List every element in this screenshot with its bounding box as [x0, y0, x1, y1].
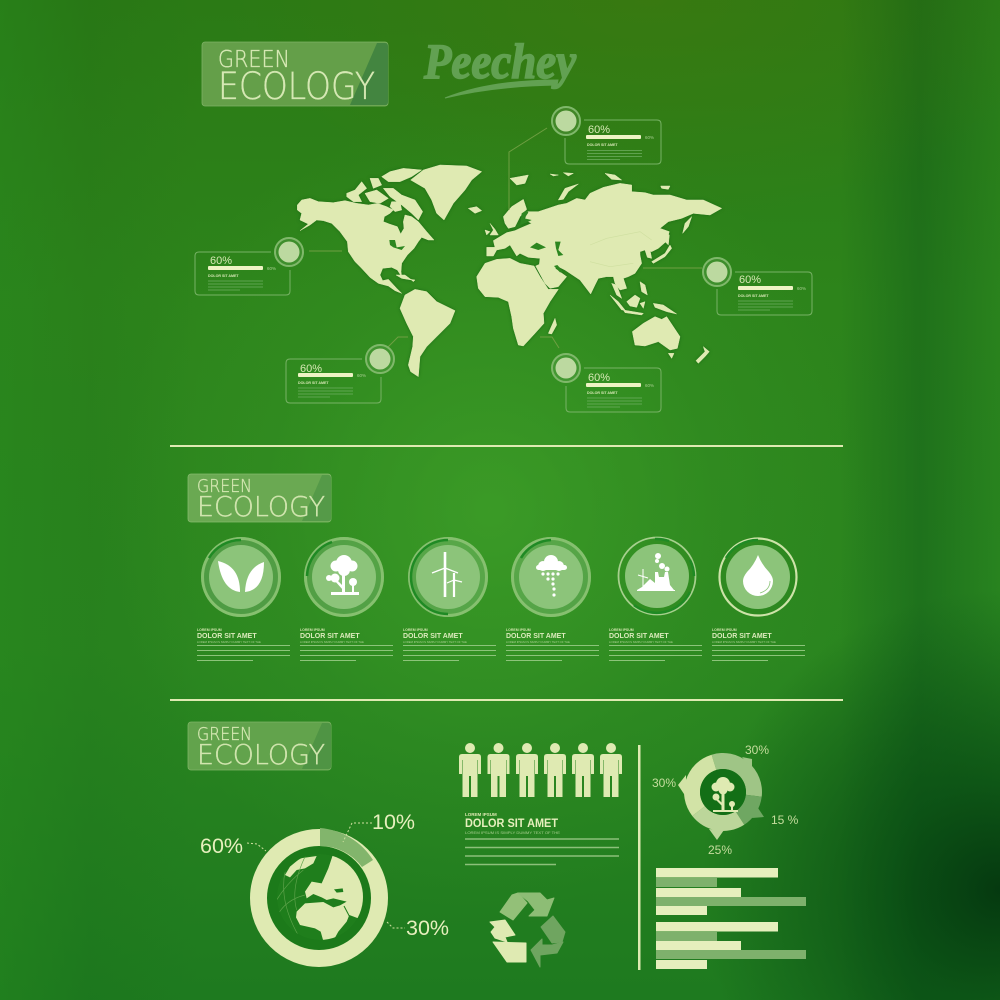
icon: recycle arrows — [490, 893, 565, 967]
text block: column 4 — [506, 628, 599, 660]
callout: bottom centre: DOLOR SIT AMET — [587, 391, 618, 395]
text block: column 1: LOREM IPSUM IS SIMPLY DUMMY TEXT OF THE — [197, 640, 261, 644]
heading badge: bottom Green Ecology — [188, 722, 331, 771]
callout: bottom left: 60% — [300, 363, 322, 375]
centre tree icon — [700, 769, 746, 815]
globe — [277, 856, 363, 940]
ring labels: 30% — [745, 743, 769, 757]
text block: column 3: LOREM IPSUM IS SIMPLY DUMMY TEXT OF THE — [403, 640, 467, 644]
callout: left: DOLOR SIT AMET — [208, 274, 239, 278]
logo: Peechey script: Peechey — [423, 33, 577, 89]
text block: column 2 — [300, 628, 393, 660]
text block: column 1 — [197, 628, 290, 660]
callout: bottom centre — [540, 337, 661, 412]
people pictogram row — [459, 743, 622, 797]
text block: column 1: DOLOR SIT AMET — [197, 633, 257, 640]
text block: column 1: LOREM IPSUM — [197, 628, 222, 632]
heading badge: middle Green Ecology: GREEN — [197, 476, 252, 497]
icon badge: wind turbines — [408, 537, 488, 617]
text block: column 6: LOREM IPSUM — [712, 628, 737, 632]
segmented ring chart with tree — [652, 743, 799, 857]
text block: column 3: LOREM IPSUM — [403, 628, 428, 632]
text block: column 6: LOREM IPSUM IS SIMPLY DUMMY TEXT OF THE — [712, 640, 776, 644]
callout: bottom left — [286, 337, 408, 403]
icon badge: leaves — [201, 537, 281, 617]
text block: people caption — [465, 812, 619, 864]
callout: bottom left: 60% — [357, 373, 366, 378]
map: the Americas and Greenland — [297, 165, 482, 377]
icon badge: trees — [304, 537, 384, 617]
callout: right: 60% — [797, 286, 806, 291]
text block: column 2: LOREM IPSUM IS SIMPLY DUMMY TEXT OF THE — [300, 640, 364, 644]
callout: top right: 60% — [588, 124, 610, 136]
world map — [297, 165, 722, 377]
heading badge: bottom Green Ecology: GREEN — [197, 724, 252, 745]
text block: column 5: LOREM IPSUM — [609, 628, 634, 632]
text block: column 2: DOLOR SIT AMET — [300, 633, 360, 640]
text block: column 3: DOLOR SIT AMET — [403, 633, 463, 640]
text block: column 2: LOREM IPSUM — [300, 628, 325, 632]
callout: right — [643, 257, 812, 315]
callout: right: DOLOR SIT AMET — [738, 294, 769, 298]
bar chart — [656, 868, 806, 969]
icon badge: factory — [618, 538, 696, 614]
text block: people caption: DOLOR SIT AMET — [465, 816, 559, 830]
heading badge: bottom Green Ecology: ECOLOGY — [197, 738, 325, 771]
text block: people caption: LOREM IPSUM — [465, 812, 497, 817]
text block: column 3 — [403, 628, 496, 660]
ring labels: 15 % — [771, 813, 799, 827]
donut ring — [258, 828, 380, 958]
map: Eurasia, Africa and Oceania — [477, 173, 722, 363]
donut labels: 60% — [200, 834, 243, 858]
heading badge: middle Green Ecology — [188, 474, 331, 523]
callout: bottom centre: 60% — [645, 383, 654, 388]
callout: top right: 60% — [645, 135, 654, 140]
callout: left: 60% — [210, 255, 232, 267]
callout: bottom centre: 60% — [588, 372, 610, 384]
icon badge: rain cloud — [511, 537, 591, 617]
icon badge: water drop — [720, 538, 796, 616]
donut labels: 30% — [406, 916, 449, 940]
text block: column 6: DOLOR SIT AMET — [712, 633, 772, 640]
text block: column 5: DOLOR SIT AMET — [609, 633, 669, 640]
ring labels — [652, 743, 799, 857]
ring segments — [678, 753, 764, 840]
heading badge: top Green Ecology: GREEN — [218, 45, 290, 73]
text block: column 5 — [609, 628, 702, 660]
callout: top right: DOLOR SIT AMET — [587, 143, 618, 147]
heading badge: middle Green Ecology: ECOLOGY — [197, 490, 325, 523]
callout: right: 60% — [739, 274, 761, 286]
callout: left: 60% — [267, 266, 276, 271]
text block: people caption: LOREM IPSUM IS SIMPLY DUMMY TEXT OF THE — [465, 830, 560, 835]
ring labels: 25% — [708, 843, 732, 857]
text block: column 4: LOREM IPSUM — [506, 628, 531, 632]
donut chart with globe — [200, 810, 449, 958]
heading badge: top Green Ecology: ECOLOGY — [218, 65, 375, 108]
text block: column 4: DOLOR SIT AMET — [506, 633, 566, 640]
heading badge: top Green Ecology — [202, 42, 388, 108]
text block: column 6 — [712, 628, 805, 660]
ring labels: 30% — [652, 776, 676, 790]
callout: top right — [509, 106, 661, 210]
text block: column 4: LOREM IPSUM IS SIMPLY DUMMY TEXT OF THE — [506, 640, 570, 644]
callout: left — [195, 237, 342, 295]
donut labels — [200, 810, 449, 940]
callout: bottom left: DOLOR SIT AMET — [298, 381, 329, 385]
vertical divider — [638, 745, 640, 970]
text block: column 5: LOREM IPSUM IS SIMPLY DUMMY TEXT OF THE — [609, 640, 673, 644]
donut labels: 10% — [372, 810, 415, 834]
